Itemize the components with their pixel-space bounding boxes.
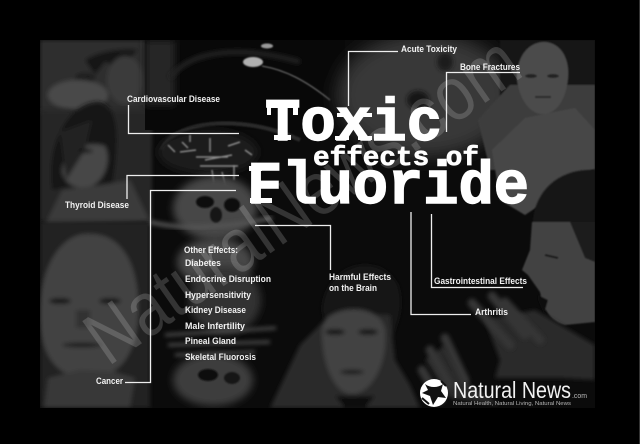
label: Bone Fractures with leader: Bone Fractures <box>460 62 520 72</box>
photo: bald cancer patient <box>40 222 150 408</box>
label: Bone Fractures with leader <box>446 62 520 132</box>
title: Toxic: Toxic <box>265 91 442 159</box>
title: effects of: effects of <box>313 144 479 174</box>
label: Harmful Effects on the Brain with leader: Harmful Effects <box>329 272 391 282</box>
label: Acute Toxicity with leader <box>348 44 457 106</box>
label: Arthritis with leader: Arthritis <box>475 307 508 317</box>
photo: skeleton spine and skulls <box>150 130 276 406</box>
logo: Natural News <box>420 377 587 407</box>
list: other effects: Pineal Gland <box>185 336 236 346</box>
photo: woman with short hair <box>40 102 152 225</box>
label: Arthritis with leader <box>411 212 508 317</box>
photo collage panel <box>40 19 595 408</box>
logo wordmark: Natural News <box>453 377 571 403</box>
label: Harmful Effects on the Brain with leader <box>255 226 391 293</box>
photo: elderly man <box>478 40 595 215</box>
photo: raised hands <box>425 310 595 405</box>
list: other effects: Hypersensitivity <box>185 290 251 300</box>
photo: baby face <box>337 33 513 157</box>
label: Cardiovascular Disease with leader <box>127 94 239 134</box>
list: other effects: Diabetes <box>185 258 221 268</box>
label: Gastrointestinal Effects with leader <box>432 214 527 288</box>
photo: woman holding head <box>270 265 420 408</box>
label: Thyroid Disease with leader: Thyroid Disease <box>65 200 129 210</box>
logo tagline: Natural Health, Natural Living, Natural News <box>453 401 571 407</box>
label: Acute Toxicity with leader: Acute Toxicity <box>401 44 457 54</box>
title <box>247 91 529 222</box>
logo: Natural News: .com <box>572 393 587 400</box>
label: Thyroid Disease with leader <box>65 176 239 210</box>
label: Cancer with leader: Cancer <box>96 376 123 386</box>
photo: coughing man <box>522 170 595 325</box>
label: Harmful Effects on the Brain with leader: on the Brain <box>329 283 377 293</box>
label: Gastrointestinal Effects with leader: Gastrointestinal Effects <box>434 276 527 286</box>
title: Fluoride: Fluoride <box>247 154 529 222</box>
icon: globe <box>420 379 448 407</box>
list: other effects <box>184 245 271 362</box>
photo: reclining patient <box>40 40 145 112</box>
list: other effects: Skeletal Fluorosis <box>185 352 256 362</box>
list: other effects: Other Effects: <box>184 245 238 255</box>
photo: dark glass dish <box>145 40 345 150</box>
list: other effects: Endocrine Disruption <box>185 274 271 284</box>
list: other effects: Male Infertility <box>185 321 245 331</box>
list: other effects: Kidney Disease <box>185 305 246 315</box>
label: Cardiovascular Disease with leader: Cardiovascular Disease <box>127 94 220 104</box>
label: Cancer with leader <box>96 190 236 386</box>
